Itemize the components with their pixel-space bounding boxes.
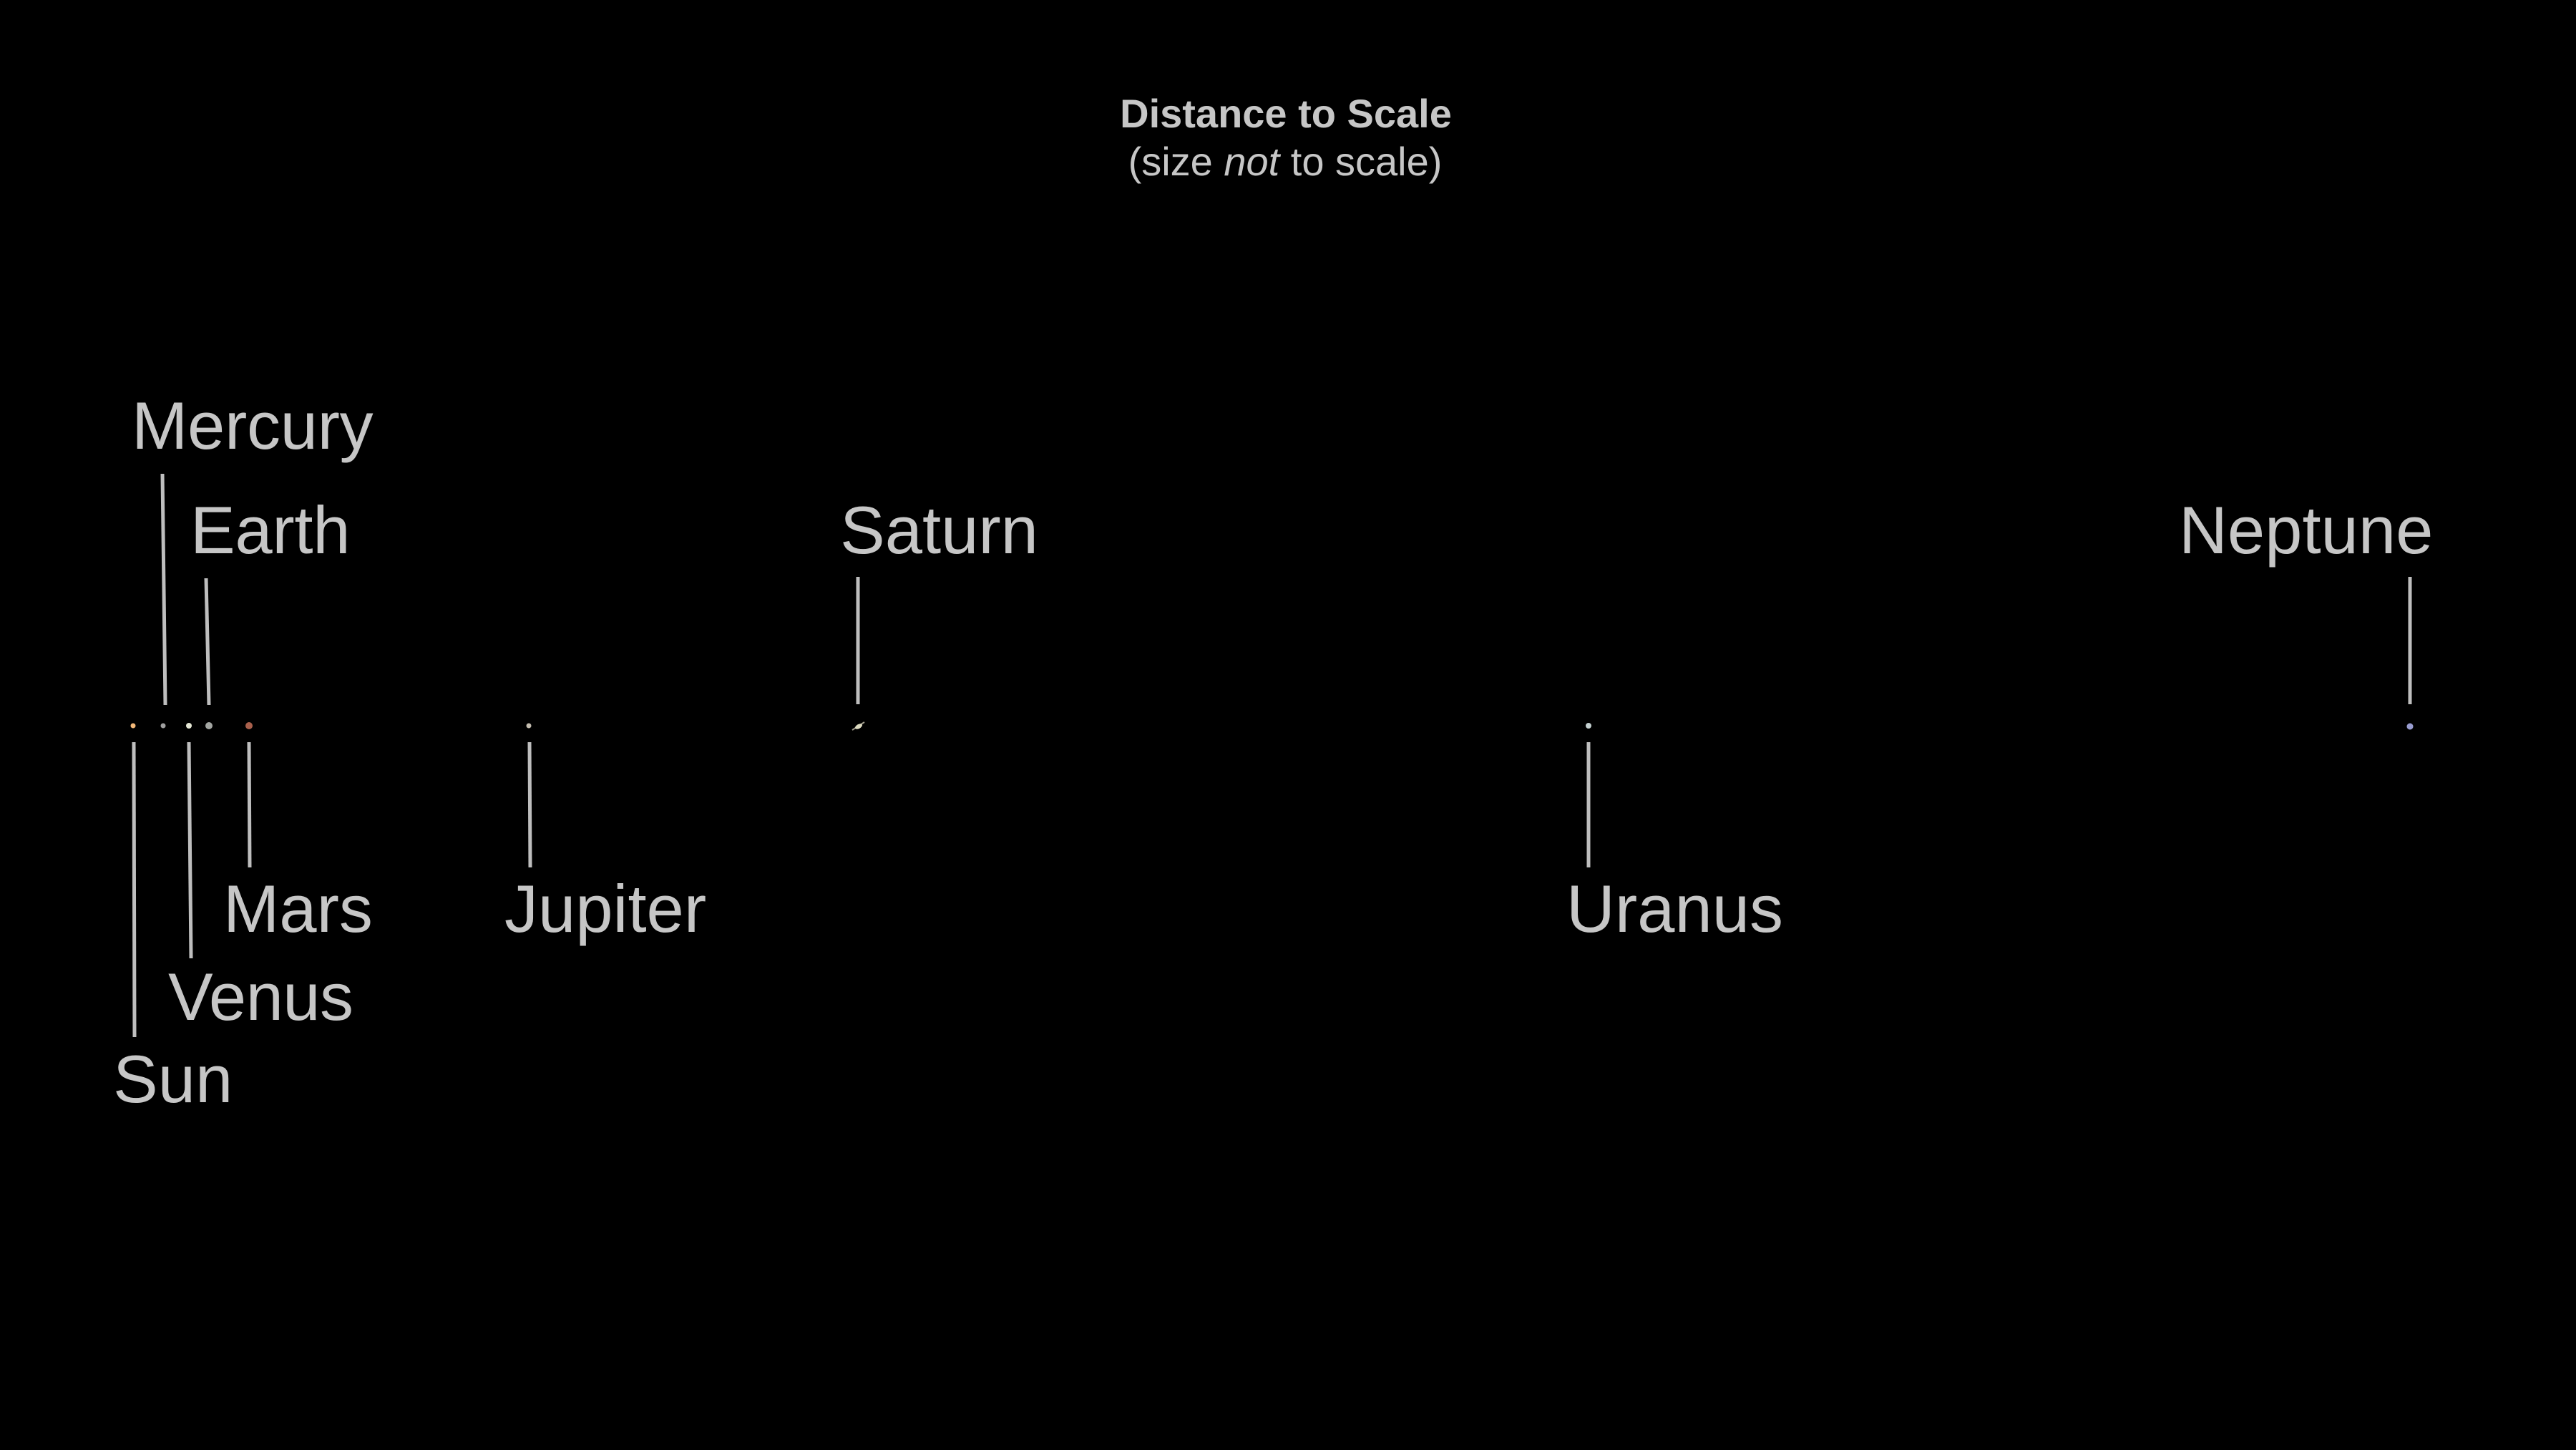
planet: Earth — [205, 722, 213, 729]
label: Mars: Mars — [223, 871, 373, 946]
planet: Uranus — [1586, 723, 1591, 729]
leader: Sun — [134, 742, 135, 1037]
leader: Earth — [206, 578, 209, 705]
planet: Mars — [245, 722, 253, 729]
leader: Mercury — [162, 474, 165, 705]
label: Sun: Sun — [113, 1041, 233, 1116]
planet: Jupiter — [527, 723, 531, 729]
leader: Venus — [189, 742, 191, 958]
title: Distance to Scale — [1120, 91, 1452, 136]
title: (size not to scale) — [1128, 139, 1442, 184]
label: Jupiter: Jupiter — [504, 871, 706, 946]
planet: Sun — [130, 723, 136, 729]
title — [1120, 91, 1452, 184]
leader: Saturn — [856, 577, 860, 704]
planet: Venus — [186, 723, 192, 729]
leader: Mars — [249, 742, 250, 867]
label: Uranus: Uranus — [1566, 871, 1783, 946]
planet: Mercury — [160, 723, 166, 729]
label: Saturn: Saturn — [840, 492, 1038, 568]
leader: Neptune — [2409, 577, 2411, 704]
label: Mercury: Mercury — [132, 388, 374, 463]
label: Venus: Venus — [168, 959, 353, 1034]
planet: Saturn — [852, 722, 864, 730]
leader: Uranus — [1587, 742, 1590, 867]
planet: Neptune — [2407, 723, 2413, 730]
label: Neptune: Neptune — [2179, 492, 2433, 568]
label: Earth: Earth — [190, 492, 350, 568]
